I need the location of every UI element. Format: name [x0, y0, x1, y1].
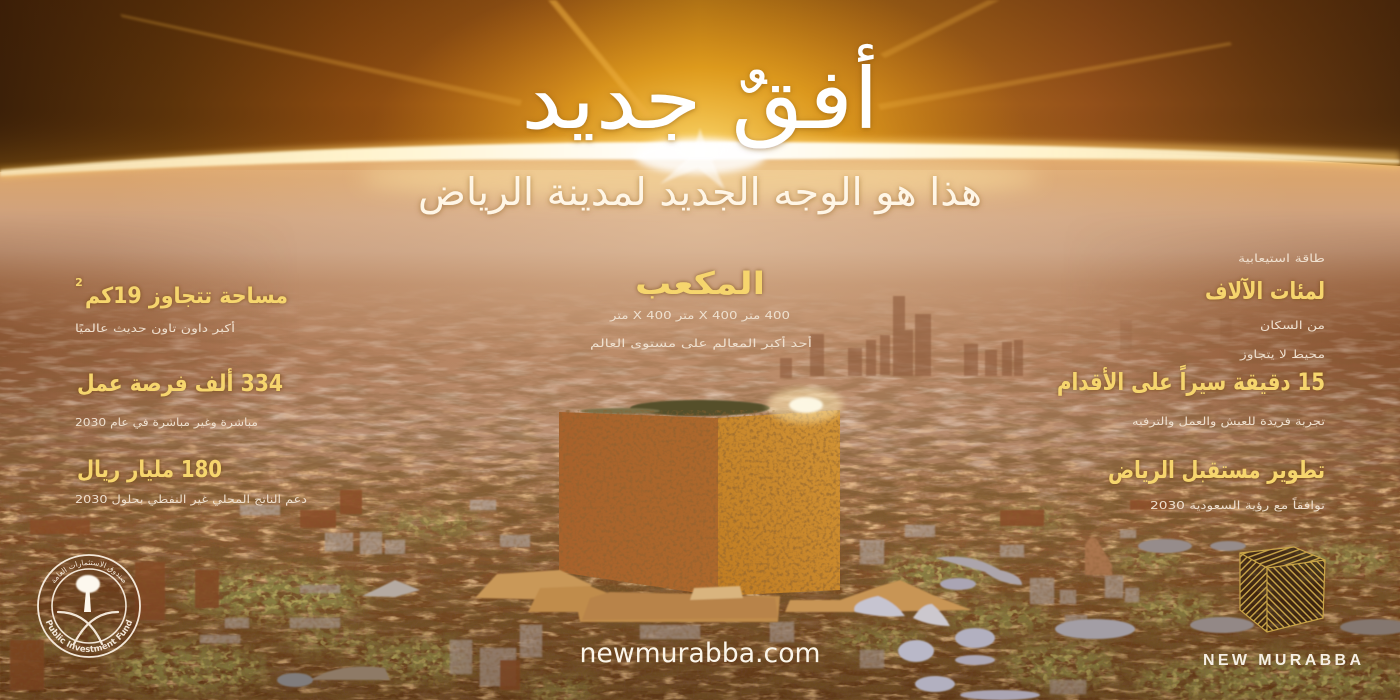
background: green park patches — [16, 503, 1400, 700]
stat: capacity: طاقة استيعابية — [1238, 252, 1325, 265]
stat: walking distance: 15 دقيقة سيراً على الأقدام — [1057, 365, 1325, 396]
seal ring text: Public Investment Fund — [46, 619, 132, 652]
center block: the cube facts: أحد أكبر المعالم على مستوى العالم — [590, 336, 812, 350]
center block: the cube facts — [590, 266, 812, 350]
logo: Public Investment Fund seal — [37, 554, 141, 658]
stat: capacity: لمئات الآلاف — [1205, 277, 1325, 305]
stat: future of Riyadh: تطوير مستقبل الرياض — [1108, 456, 1325, 484]
stat: GDP: 180 مليار ريال — [77, 457, 222, 483]
cube left face — [559, 412, 718, 596]
seal ring text — [46, 560, 132, 652]
cube roof greenery — [580, 400, 770, 416]
stat: walking distance — [1057, 348, 1325, 428]
stat: future of Riyadh: توافقاً مع رؤية السعودية 2030 — [1150, 497, 1325, 512]
stat: area: 2 — [75, 276, 83, 289]
stat: future of Riyadh — [1108, 456, 1325, 512]
background: horizon light band — [0, 128, 1400, 200]
stat: capacity — [1205, 252, 1325, 332]
stat: walking distance: تجربة فريدة للعيش والعمل والترفيه — [1132, 415, 1325, 428]
title: أفقٌ جديد — [521, 44, 879, 149]
subtitle: هذا هو الوجه الجديد لمدينة الرياض — [418, 170, 982, 215]
stat: jobs — [75, 367, 283, 429]
center block: the cube facts: 400 متر X 400 متر X 400 متر — [609, 309, 790, 322]
right stats column — [1057, 252, 1325, 512]
stat: area — [75, 276, 288, 335]
building: the cube — [559, 387, 843, 596]
stat: GDP: دعم الناتج المحلي غير النفطي بحلول 2030 — [75, 493, 307, 506]
stat: jobs: مباشرة وغير مباشرة في عام 2030 — [75, 416, 258, 429]
center block: the cube facts: المكعب — [635, 266, 765, 302]
stat: GDP — [75, 457, 307, 506]
stat: jobs: 334 ألف فرصة عمل — [77, 367, 283, 397]
seal crossed swords — [58, 612, 118, 644]
stat: capacity: من السكان — [1260, 319, 1325, 332]
building: podium and domes — [277, 539, 1400, 700]
background: land and city haze — [0, 146, 1400, 700]
background: sky — [0, 0, 1400, 190]
left stats column — [75, 276, 307, 506]
cube facade texture — [559, 410, 840, 596]
logo wordmark: NEW MURABBA: NEW MURABBA — [1203, 652, 1361, 669]
stat: area: أكبر داون تاون حديث عالميًا — [75, 321, 235, 335]
seal ring text: صندوق الاستثمارات العامة — [52, 560, 125, 583]
logo: New Murabba cube mark — [1240, 547, 1325, 632]
stat: walking distance: محيط لا يتجاوز — [1239, 348, 1325, 361]
background: sun rays — [120, 0, 1232, 118]
stat: area: مساحة تتجاوز 19كم — [85, 284, 288, 309]
background: foreground city blocks — [0, 470, 1400, 700]
cube right face — [718, 410, 840, 596]
background: distant skyline — [780, 296, 1232, 378]
website url: newmurabba.com — [580, 638, 820, 669]
cube sun glint — [767, 387, 843, 423]
seal palm — [76, 575, 100, 612]
